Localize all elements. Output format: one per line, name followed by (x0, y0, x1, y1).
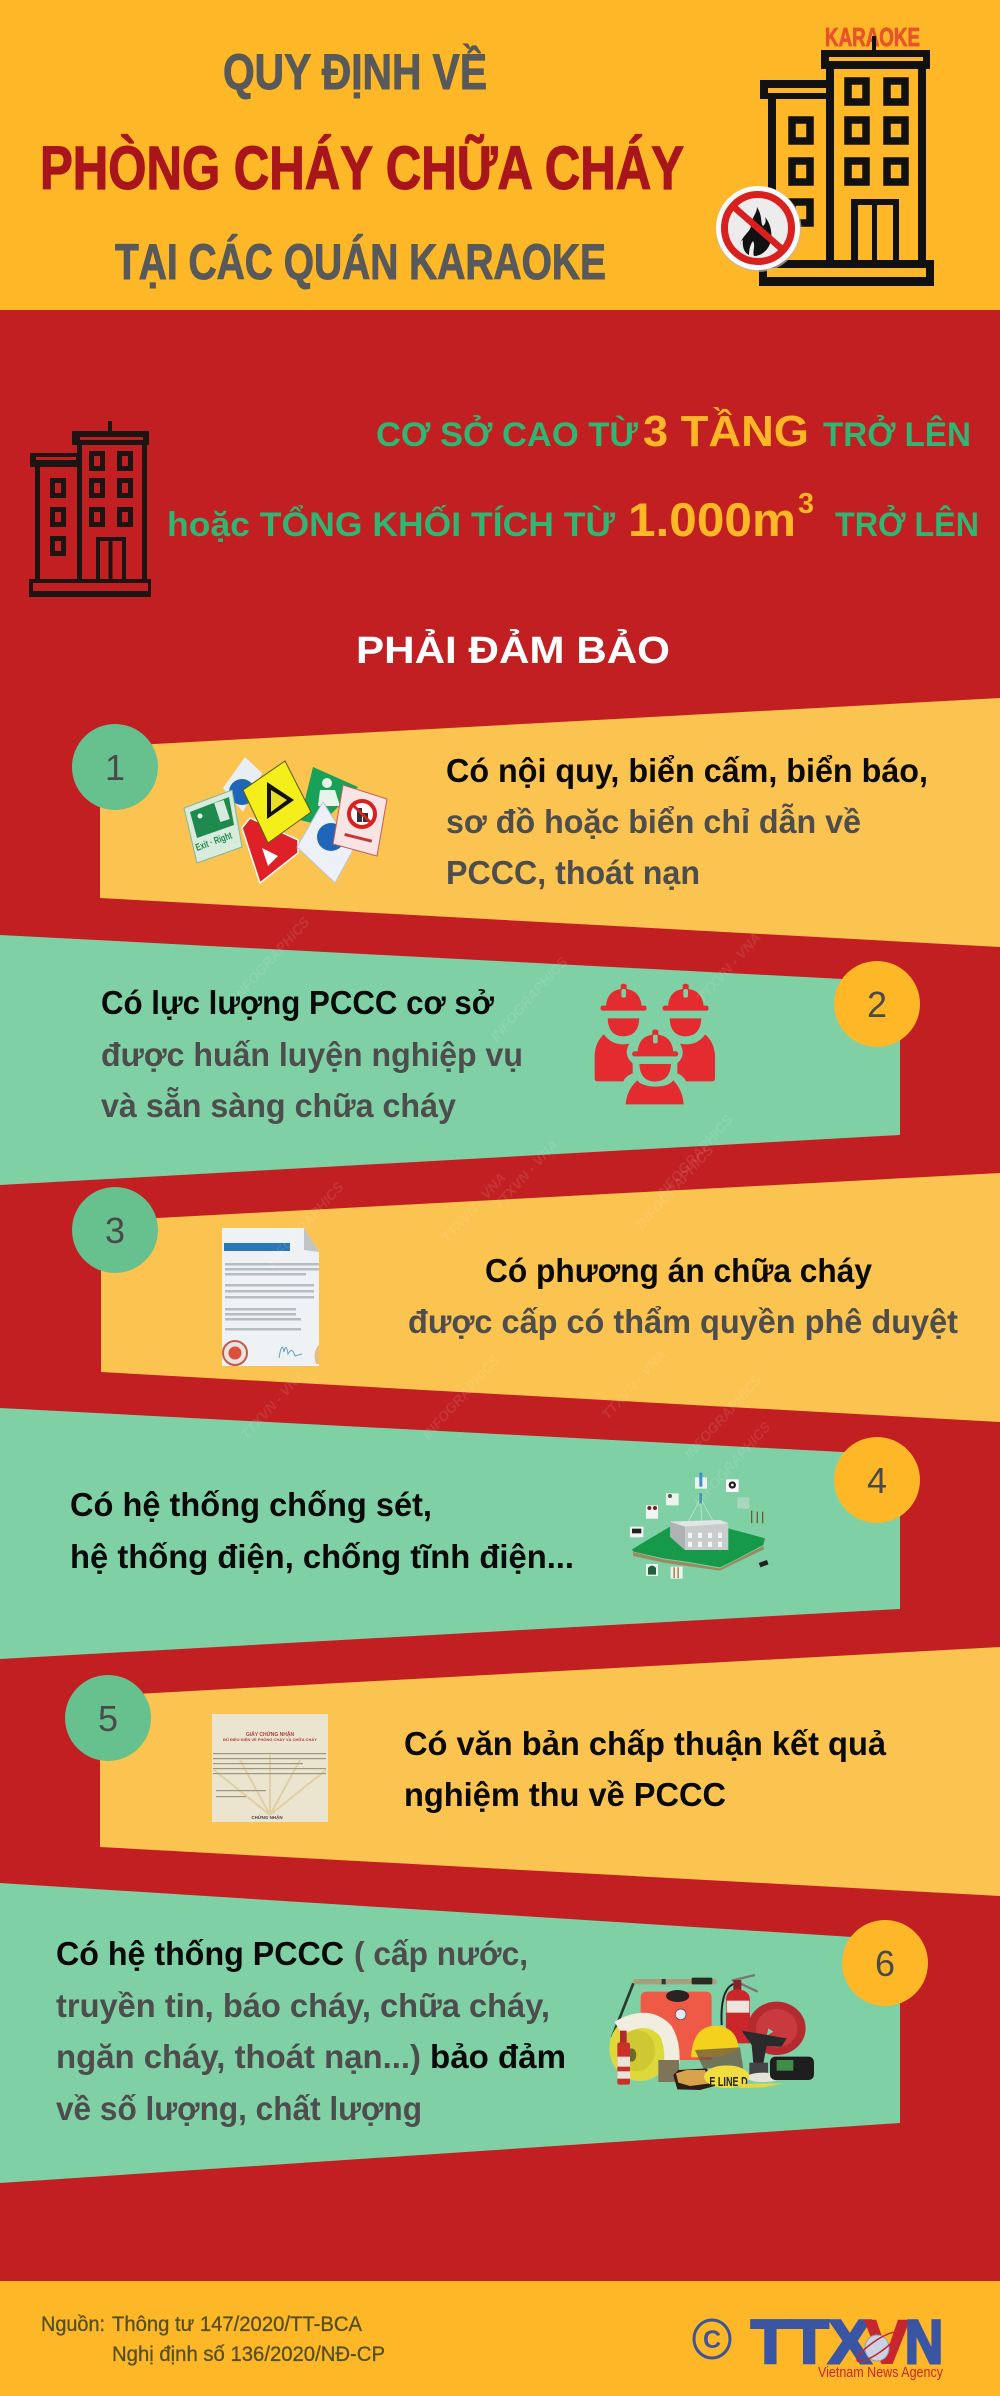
text block 6: truyền tin, báo cháy, chữa cháy, (56, 1987, 550, 2024)
icon: firefighting equipment (609, 1975, 814, 2090)
header panel (0, 0, 1000, 310)
watermarks (229, 913, 774, 1509)
text block 2 (101, 984, 523, 1124)
watermarks: TTXVN - VNA (237, 1366, 308, 1442)
footer panel (0, 2281, 1000, 2396)
icon: safety signs (184, 757, 387, 883)
watermarks: INFOGRAPHICS (263, 1178, 347, 1269)
badge 2: 2 (867, 984, 887, 1025)
text block 4: Có hệ thống chống sét, (70, 1486, 432, 1523)
title: TẠI CÁC QUÁN KARAOKE (115, 234, 606, 290)
badge 3 (72, 1187, 158, 1273)
watermarks: INFOGRAPHICS (681, 1371, 765, 1462)
heading: must ensure: PHẢI ĐẢM BẢO (356, 628, 670, 672)
icon: karaoke building with no-fire sign: KARAOKE (825, 22, 920, 52)
text block 1 (446, 752, 928, 891)
text block 6: ngăn cháy, thoát nạn...) (56, 2038, 421, 2075)
panel: item 3 (72, 1173, 1000, 1422)
text block 4: hệ thống điện, chống tĩnh điện... (70, 1538, 574, 1575)
text block 6: bảo đảm (430, 2038, 566, 2075)
icon: safety signs: Exit · Right (194, 830, 234, 854)
panel: item 2 (0, 935, 920, 1185)
badge 4 (834, 1437, 920, 1523)
logo: TTXVN: N (905, 2308, 943, 2376)
text block 3: được cấp có thẩm quyền phê duyệt (408, 1303, 958, 1340)
condition text: CƠ SỞ CAO TỪ (376, 416, 639, 454)
icon: lightning protection system (630, 1473, 769, 1579)
text block 6 (56, 1935, 566, 2127)
logo: TTXVN: V (865, 2308, 909, 2376)
watermarks: TTXVN - VNA (598, 1346, 669, 1422)
condition text: hoặc TỔNG KHỐI TÍCH TỪ (167, 505, 616, 544)
badge 6: 6 (875, 1943, 895, 1984)
logo: TTXVN (694, 2308, 943, 2381)
logo: TTXVN: C (703, 2326, 721, 2354)
watermarks: TTXVN - VNA (438, 1169, 509, 1245)
text block 1: sơ đồ hoặc biển chỉ dẫn về (446, 803, 861, 840)
logo: TTXVN: Vietnam News Agency (818, 2364, 943, 2381)
watermarks: INFOGRAPHICS (690, 1418, 774, 1509)
text block 5: Có văn bản chấp thuận kết quả (404, 1725, 887, 1762)
text block 4 (70, 1486, 574, 1575)
logo: TTXVN: TTX (751, 2308, 871, 2376)
text block 6: ( cấp nước, (354, 1935, 528, 1972)
condition text: TRỞ LÊN (835, 506, 979, 544)
condition text (167, 406, 979, 546)
panel: item 6 (0, 1883, 928, 2183)
panel: item 4 (0, 1408, 920, 1659)
text block 3 (408, 1252, 958, 1340)
watermarks: INFOGRAPHICS (419, 1351, 503, 1442)
condition text: 3 TẦNG (643, 406, 809, 456)
badge 1: 1 (105, 747, 125, 788)
text block 6: Có hệ thống PCCC (56, 1935, 344, 1972)
badge 6 (842, 1920, 928, 2006)
watermarks: INFOGRAPHICS (487, 953, 571, 1044)
panel: item 5 (65, 1647, 1000, 1896)
text block 2: Có lực lượng PCCC cơ sở (101, 984, 494, 1021)
text block 3: Có phương án chữa cháy (485, 1252, 873, 1289)
text block 1: PCCC, thoát nạn (446, 854, 700, 891)
badge 5 (65, 1675, 151, 1761)
source text: Nghị định số 136/2020/NĐ-CP (112, 2343, 385, 2366)
text block 6: về số lượng, chất lượng (56, 2090, 422, 2127)
title (40, 44, 684, 290)
badge 2 (834, 961, 920, 1047)
icon: firefighters (595, 984, 715, 1104)
watermarks: INFOGRAPHICS (229, 913, 313, 1004)
text block 5: nghiệm thu về PCCC (404, 1776, 726, 1813)
source text: Nguồn: (41, 2313, 105, 2336)
title: QUY ĐỊNH VỀ (223, 44, 487, 100)
watermarks: TTXVN - VNA (693, 929, 764, 1005)
watermarks: INFOGRAPHICS (652, 1111, 736, 1202)
badge 3: 3 (105, 1210, 125, 1251)
panel: item 1 (72, 698, 1000, 947)
icon: no fire sign (716, 186, 802, 272)
icon: certificate (212, 1714, 328, 1822)
icon: document (222, 1228, 319, 1366)
watermarks: TTXVN - VNA (490, 1136, 561, 1212)
badge 5: 5 (98, 1698, 118, 1739)
text block 2: được huấn luyện nghiệp vụ (101, 1036, 523, 1073)
condition text: 1.000m (628, 493, 796, 546)
icon: karaoke building with no-fire sign (716, 22, 934, 286)
badge 4: 4 (867, 1460, 887, 1501)
text block 5 (404, 1725, 887, 1813)
badge 1 (72, 724, 158, 810)
icon: certificate: CHỨNG NHẬN (251, 1814, 283, 1820)
source text (41, 2313, 385, 2366)
title: PHÒNG CHÁY CHỮA CHÁY (40, 134, 684, 202)
icon: certificate: ĐỦ ĐIỀU KIỆN VỀ PHÒNG CHÁY VÀ CHỮA CHÁY (223, 1737, 317, 1742)
source text: Thông tư 147/2020/TT-BCA (112, 2313, 362, 2336)
icon: certificate: GIẤY CHỨNG NHẬN (246, 1731, 294, 1738)
text block 1: Có nội quy, biển cấm, biển báo, (446, 752, 928, 789)
icon: building (29, 421, 151, 597)
condition text: 3 (798, 488, 814, 520)
watermarks: INFOGRAPHICS (633, 1141, 717, 1232)
text block 2: và sẵn sàng chữa cháy (101, 1086, 457, 1124)
icon: firefighting equipment: E LINE D (709, 2075, 748, 2089)
condition text: TRỞ LÊN (823, 416, 971, 454)
